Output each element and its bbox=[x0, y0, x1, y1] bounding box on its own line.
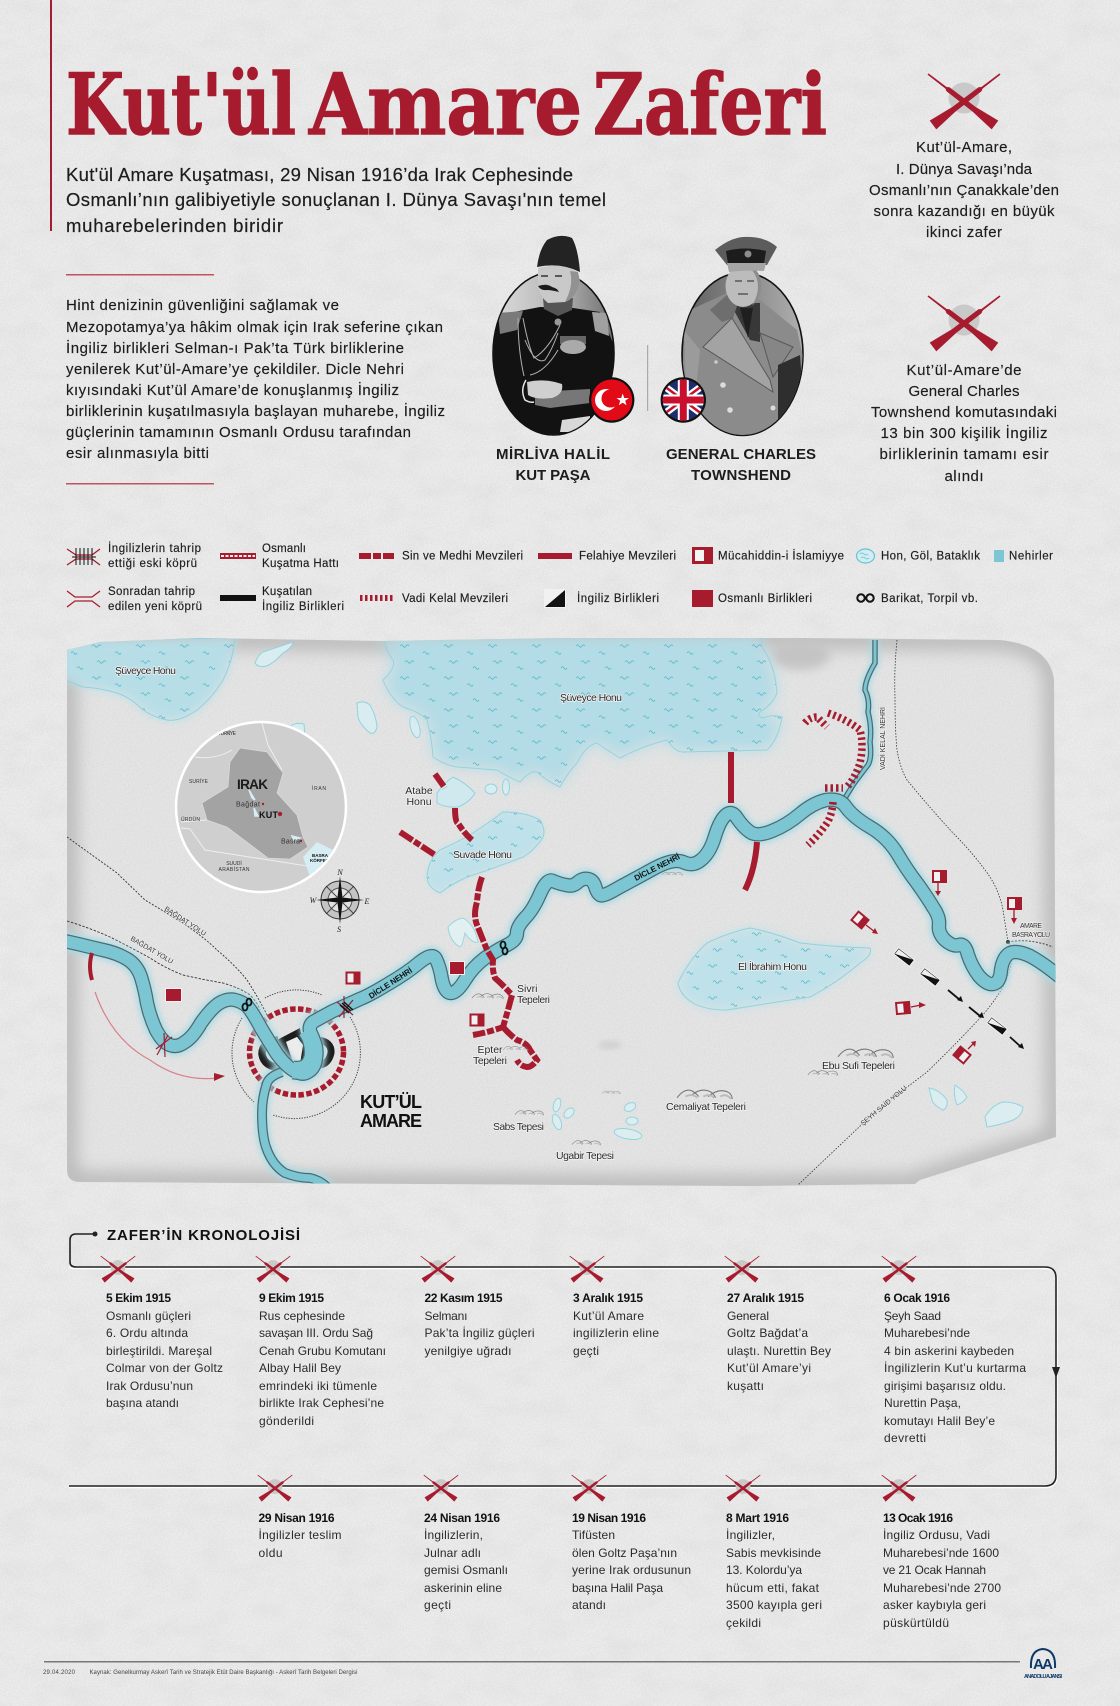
event: 9 Ekim 1915: Rus cephesinde bbox=[259, 1309, 345, 1323]
fact 2: birliklerinin tamamı esir bbox=[880, 446, 1048, 463]
map labels: Honu bbox=[406, 796, 432, 808]
event: 27 Aralık 1915: Kut’ül Amare’yi bbox=[727, 1361, 811, 1375]
legend: Ottoman units bbox=[692, 590, 812, 607]
map panel bbox=[60, 630, 1060, 1190]
event: 24 Nisan 1916: Julnar adlı bbox=[424, 1546, 481, 1560]
event: 6 Ocak 1916: İngilizlerin Kut’u kurtarma bbox=[884, 1361, 1026, 1375]
lake: southern ponds bbox=[551, 1085, 1023, 1141]
fact 2: Townshend komutasındaki bbox=[871, 404, 1057, 421]
event: 6 Ocak 1916: Nurettin Paşa, bbox=[884, 1396, 961, 1410]
event: 13 Ocak 1916 bbox=[881, 1475, 1001, 1630]
event: 19 Nisan 1916: 19 Nisan 1916 bbox=[572, 1511, 646, 1525]
icon: Turkish flag bbox=[589, 377, 634, 423]
intro paragraph: yenilerek Kut’ül-Amare’ye çekildiler. Dicle Nehri bbox=[66, 361, 404, 378]
event: 8 Mart 1916 bbox=[725, 1475, 822, 1630]
river: Dicle bbox=[60, 640, 1060, 1188]
lake: Şüveyce Honu west bbox=[60, 638, 235, 720]
inset map: Iraq: KUT bbox=[259, 810, 278, 820]
event: 5 Ekim 1915 bbox=[100, 1256, 223, 1410]
event: 19 Nisan 1916: yerine Irak ordusunun bbox=[572, 1563, 691, 1577]
compass rose: N bbox=[336, 868, 343, 877]
Kut encirclement dotted circle bbox=[232, 990, 360, 1119]
river and road labels: DİCLE NEHRİ bbox=[633, 852, 681, 883]
map labels: Epter bbox=[477, 1044, 503, 1056]
compass rose bbox=[310, 868, 370, 934]
road: Bağdat south bbox=[67, 921, 260, 1010]
legend: barricade: Barikat, Torpil vb. bbox=[881, 593, 978, 605]
legend: Mujahideen: Mücahiddin-i İslamiyye bbox=[718, 550, 844, 562]
chronology heading: ZAFER’İN KRONOLOJİSİ bbox=[107, 1227, 300, 1244]
intro paragraph: kıyısındaki Kut’ül Amare’de konuşlanmış İngiliz bbox=[66, 381, 399, 399]
event: 24 Nisan 1916: gemisi Osmanlı bbox=[424, 1563, 508, 1577]
Ottoman siege line bbox=[250, 1009, 344, 1095]
timeline line bbox=[69, 1232, 1060, 1488]
event: 6 Ocak 1916 bbox=[881, 1256, 1026, 1445]
hills bbox=[472, 872, 893, 1145]
logo: Anadolu Ajansı: AA bbox=[1033, 1656, 1053, 1673]
road junction dot bbox=[1006, 940, 1010, 944]
label: Kut'ül Amare bbox=[360, 1092, 422, 1131]
legend: destroyed old bridge: ettiği eski köprü bbox=[108, 558, 197, 570]
Sin and Medhi positions bbox=[400, 774, 537, 1067]
compass rose: S bbox=[337, 925, 341, 934]
map labels: Şüveyce Honu bbox=[115, 665, 176, 677]
timeline row 1 bbox=[100, 1256, 1026, 1445]
event: 22 Kasım 1915: Selmanı bbox=[424, 1309, 468, 1323]
event: 19 Nisan 1916: Tifüsten bbox=[572, 1528, 615, 1542]
icon: crossed rifles 2 bbox=[928, 295, 1000, 351]
legend: siege line bbox=[220, 543, 339, 570]
river and road labels: VADİ KELAL NEHRİ bbox=[878, 707, 887, 770]
bridge hatch bbox=[340, 1002, 353, 1013]
event: 24 Nisan 1916: İngilizlerin, bbox=[424, 1528, 483, 1542]
legend: British units bbox=[544, 590, 659, 608]
event: 22 Kasım 1915: Pak’ta İngiliz güçleri bbox=[424, 1326, 534, 1340]
legend: besieged British: Kuşatılan bbox=[262, 586, 312, 598]
map labels: Şüveyce Honu bbox=[560, 692, 622, 704]
legend: Vadi Kelal positions: Vadi Kelal Mevzileri bbox=[402, 593, 508, 605]
event: 19 Nisan 1916 bbox=[571, 1475, 691, 1612]
map labels: Sabs Tepesi bbox=[493, 1121, 544, 1133]
inset map: Iraq: SURİYE bbox=[189, 778, 209, 785]
event: 3 Aralık 1915: 3 Aralık 1915 bbox=[573, 1291, 643, 1305]
legend: lake: Hon, Göl, Bataklık bbox=[881, 550, 980, 562]
fact 2: alındı bbox=[944, 468, 984, 485]
Ottoman units bbox=[166, 962, 464, 1002]
event: 24 Nisan 1916: geçti bbox=[424, 1598, 451, 1612]
event: 8 Mart 1916: hücum etti, fakat bbox=[726, 1581, 820, 1595]
legend: rivers: Nehirler bbox=[1009, 550, 1053, 562]
header accent line bbox=[50, 0, 52, 231]
besieged British forces bbox=[262, 1028, 331, 1068]
event: 5 Ekim 1915: 5 Ekim 1915 bbox=[106, 1291, 171, 1305]
event: 27 Aralık 1915: 27 Aralık 1915 bbox=[727, 1291, 804, 1305]
legend: Felahiye positions: Felahiye Mevzileri bbox=[579, 550, 676, 562]
inset map: Iraq: İRAN bbox=[312, 785, 326, 792]
legend: siege line: Osmanlı bbox=[262, 543, 306, 555]
icon: UK flag bbox=[660, 377, 706, 423]
event: 9 Ekim 1915: 9 Ekim 1915 bbox=[259, 1291, 324, 1305]
river and road labels: DİCLE NEHRİ bbox=[367, 966, 414, 1001]
Ottoman advance arrow bbox=[95, 992, 225, 1081]
event: 13 Ocak 1916: Muharebesi’nde 1600 bbox=[883, 1546, 999, 1560]
event: 29 Nisan 1916: İngilizler teslim bbox=[258, 1528, 342, 1542]
event: 8 Mart 1916: Sabis mevkisinde bbox=[726, 1546, 821, 1560]
commander names: KUT PAŞA bbox=[516, 467, 591, 484]
title bbox=[66, 55, 827, 154]
event: 27 Aralık 1915: General bbox=[727, 1309, 769, 1323]
intro paragraph: İngiliz birlikleri Selman-ı Pak’ta Türk birliklerine bbox=[66, 339, 404, 357]
fact 2: Kut’ül-Amare’de bbox=[906, 362, 1022, 379]
fact 2: 13 bin 300 kişilik İngiliz bbox=[880, 424, 1048, 442]
portrait divider bbox=[647, 345, 648, 411]
event: 3 Aralık 1915: ingilizlerin eline bbox=[573, 1326, 659, 1340]
lake: Sivri pond bbox=[448, 918, 478, 947]
event: 9 Ekim 1915: Albay Halil Bey bbox=[259, 1361, 341, 1375]
inset map: Iraq: KÖRFEZİ bbox=[310, 857, 330, 863]
British units bbox=[894, 948, 1024, 1049]
fact 2: General Charles bbox=[908, 383, 1020, 400]
river and road labels: ŞEYH SAİD YOLU bbox=[859, 1083, 909, 1128]
event: 5 Ekim 1915: Irak Ordusu’nun bbox=[106, 1379, 193, 1393]
event: 6 Ocak 1916: girişimi başarısız oldu. bbox=[884, 1379, 1006, 1393]
event: 22 Kasım 1915 bbox=[420, 1256, 534, 1358]
commander names bbox=[496, 446, 816, 484]
portrait: General Charles Townshend bbox=[680, 237, 806, 440]
legend: later destroyed new bridge: edilen yeni köprü bbox=[108, 601, 202, 613]
event: 19 Nisan 1916: atandı bbox=[572, 1598, 606, 1612]
road: Vadi Kelal and Şeyh Said bbox=[798, 640, 1013, 1185]
legend: destroyed old bridge: İngilizlerin tahrip bbox=[108, 542, 201, 555]
compass rose: W bbox=[310, 896, 318, 905]
fact 1: Kut’ül-Amare, bbox=[916, 139, 1012, 156]
map labels: Ebu Sufi Tepeleri bbox=[822, 1060, 895, 1072]
compass rose: E bbox=[364, 897, 370, 906]
event: 8 Mart 1916: 8 Mart 1916 bbox=[726, 1511, 789, 1525]
fact 1: I. Dünya Savaşı’nda bbox=[896, 161, 1033, 178]
inset map: Iraq: ARABİSTAN bbox=[218, 866, 250, 873]
event: 24 Nisan 1916 bbox=[423, 1475, 508, 1612]
intro paragraph: Hint denizinin güvenliğini sağlamak ve bbox=[66, 297, 339, 314]
river and road labels bbox=[129, 707, 1050, 1128]
fact 1: ikinci zafer bbox=[926, 224, 1002, 241]
map labels: Suvade Honu bbox=[453, 849, 512, 861]
event: 24 Nisan 1916: askerinin eline bbox=[424, 1581, 502, 1595]
event: 13 Ocak 1916: 13 Ocak 1916 bbox=[883, 1511, 953, 1525]
event: 13 Ocak 1916: asker kaybıyla geri bbox=[883, 1598, 986, 1612]
legend: British units: İngiliz Birlikleri bbox=[577, 592, 659, 605]
logo: Anadolu Ajansı bbox=[1024, 1649, 1062, 1680]
portrait: Halil Kut Paşa bbox=[490, 236, 618, 440]
event: 22 Kasım 1915: 22 Kasım 1915 bbox=[424, 1291, 503, 1305]
map labels: Atabe bbox=[405, 785, 433, 797]
map labels: Ugabir Tepesi bbox=[556, 1150, 614, 1162]
event: 27 Aralık 1915: kuşattı bbox=[727, 1379, 764, 1393]
legend: Sin and Medhi positions: Sin ve Medhi Mevzileri bbox=[402, 550, 523, 562]
event: 9 Ekim 1915: savaşan III. Ordu Sağ bbox=[259, 1326, 373, 1340]
event: 6 Ocak 1916: devretti bbox=[884, 1431, 926, 1445]
river and road labels: BASRA YOLU bbox=[1012, 932, 1050, 939]
title: Amare bbox=[308, 55, 582, 154]
roads bbox=[67, 640, 1053, 1185]
river and road labels: AMARE bbox=[1020, 923, 1042, 930]
inset map: Iraq bbox=[176, 722, 346, 892]
intro paragraph bbox=[66, 297, 445, 462]
event: 6 Ocak 1916: 6 Ocak 1916 bbox=[884, 1291, 950, 1305]
river and road labels: BAĞDAT YOLU bbox=[129, 934, 175, 966]
title: Zaferi bbox=[593, 55, 827, 154]
event: 29 Nisan 1916: 29 Nisan 1916 bbox=[258, 1511, 335, 1525]
intro paragraph: güçlerinin tamamının Osmanlı Ordusu tarafından bbox=[66, 424, 411, 441]
river and road labels: BAĞDAT YOLU bbox=[163, 904, 208, 938]
event: 8 Mart 1916: 13. Kolordu’ya bbox=[726, 1563, 802, 1577]
event: 3 Aralık 1915: Kut’ül Amare bbox=[573, 1309, 644, 1323]
subtitle: Osmanlı’nın galibiyetiyle sonuçlanan I. Dünya Savaşı'nın temel bbox=[66, 189, 606, 210]
lake: Şüveyce Honu bbox=[383, 636, 782, 787]
map labels bbox=[115, 665, 895, 1162]
icon: crossed rifles 1 bbox=[928, 73, 1000, 129]
fact 2 bbox=[871, 362, 1057, 485]
footer rule bbox=[44, 1661, 1020, 1662]
intro paragraph: Mezopotamya’ya hâkim olmak için Irak seferine çıkan bbox=[66, 319, 443, 336]
Felahiye positions bbox=[90, 752, 757, 980]
event: 5 Ekim 1915: 6. Ordu altında bbox=[106, 1326, 188, 1340]
Mujahideen units bbox=[346, 870, 1022, 1064]
event: 9 Ekim 1915: emrindeki iki tümenle bbox=[259, 1379, 377, 1393]
footer source: 29.04.2020 bbox=[43, 1670, 76, 1676]
intro paragraph: esir alınmasıyla bitti bbox=[66, 445, 209, 462]
lake: Atabe Honu bbox=[437, 777, 475, 807]
event: 19 Nisan 1916: ölen Goltz Paşa’nın bbox=[572, 1546, 677, 1560]
legend: besieged British bbox=[220, 586, 344, 613]
event: 8 Mart 1916: çekildi bbox=[726, 1616, 761, 1630]
event: 27 Aralık 1915: ulaştı. Nurettin Bey bbox=[727, 1344, 831, 1358]
map labels: Sivri bbox=[517, 983, 537, 995]
event: 13 Ocak 1916: ve 21 Ocak Hannah bbox=[883, 1563, 986, 1577]
event: 13 Ocak 1916: Muharebesi’nde 2700 bbox=[883, 1581, 1001, 1595]
inset map: Iraq: IRAK bbox=[237, 777, 268, 792]
event: 29 Nisan 1916 bbox=[257, 1475, 342, 1560]
event: 13 Ocak 1916: püskürtüldü bbox=[883, 1616, 949, 1630]
label: Kut'ül Amare: KUT’ÜL bbox=[360, 1092, 422, 1112]
legend: later destroyed new bridge bbox=[67, 586, 202, 613]
inset map: Iraq: ÜRDÜN bbox=[181, 816, 200, 823]
map labels: Tepeleri bbox=[473, 1055, 507, 1067]
map labels: Tepeleri bbox=[517, 994, 550, 1006]
legend: Mujahideen bbox=[692, 547, 844, 564]
Vadi Kelal positions bbox=[805, 713, 862, 845]
event: 5 Ekim 1915: birleştirildi. Mareşal bbox=[106, 1344, 212, 1358]
commander names: MİRLİVA HALİL bbox=[496, 446, 610, 463]
subtitle: muharebelerinden biridir bbox=[66, 215, 283, 236]
map paper bbox=[60, 630, 1060, 1190]
barricades bbox=[242, 942, 508, 1010]
event: 9 Ekim 1915: Cenah Grubu Komutanı bbox=[259, 1344, 386, 1358]
inset map: Iraq: Bağdat bbox=[236, 802, 260, 808]
legend: Ottoman units: Osmanlı Birlikleri bbox=[718, 593, 812, 605]
bridges bbox=[156, 996, 353, 1057]
event: 9 Ekim 1915 bbox=[255, 1256, 386, 1428]
legend: siege line: Kuşatma Hattı bbox=[262, 558, 339, 570]
event: 9 Ekim 1915: birlikte Irak Cephesi’ne bbox=[259, 1396, 384, 1410]
footer source: Kaynak: Genelkurmay Askerî Tarih ve Stratejik Etüt Daire Başkanlığı - Askerî Tarih Belgeleri Dergisi bbox=[90, 1670, 358, 1676]
event: 22 Kasım 1915: yenilgiye uğradı bbox=[424, 1344, 512, 1358]
event: 3 Aralık 1915 bbox=[569, 1256, 659, 1358]
inset map: Iraq: TÜRKİYE bbox=[218, 730, 237, 737]
lake: El İbrahim Honu bbox=[678, 928, 871, 1010]
legend: destroyed old bridge bbox=[67, 542, 201, 570]
event: 8 Mart 1916: İngilizler, bbox=[726, 1528, 775, 1542]
inset map: Iraq: Basra bbox=[281, 838, 300, 846]
fact 1: sonra kazandığı en büyük bbox=[874, 203, 1055, 220]
logo: Anadolu Ajansı: ANADOLU AJANSI bbox=[1024, 1674, 1062, 1680]
legend: besieged British: İngiliz Birlikleri bbox=[262, 600, 344, 613]
commander names: TOWNSHEND bbox=[691, 467, 791, 484]
road: Bağdat north bbox=[67, 837, 267, 1015]
event: 5 Ekim 1915: Colmar von der Goltz bbox=[106, 1361, 223, 1375]
intro paragraph: birliklerinin kuşatılmasıyla başlayan muharebe, İngiliz bbox=[66, 402, 445, 420]
event: 5 Ekim 1915: başına atandı bbox=[106, 1396, 179, 1410]
timeline row 2 bbox=[257, 1475, 1001, 1630]
subtitle bbox=[66, 164, 606, 236]
title: Kut'ül bbox=[66, 55, 296, 154]
lake: small northern ponds bbox=[255, 642, 510, 795]
map labels: Cemaliyat Tepeleri bbox=[666, 1101, 746, 1113]
event: 27 Aralık 1915 bbox=[724, 1256, 831, 1393]
event: 9 Ekim 1915: gönderildi bbox=[259, 1414, 314, 1428]
label: Kut'ül Amare: AMARE bbox=[360, 1111, 422, 1131]
event: 13 Ocak 1916: İngiliz Ordusu, Vadi bbox=[883, 1528, 990, 1542]
event: 27 Aralık 1915: Goltz Bağdat’a bbox=[727, 1326, 808, 1340]
fact 1: Osmanlı’nın Çanakkale’den bbox=[869, 182, 1059, 199]
event: 5 Ekim 1915: Osmanlı güçleri bbox=[106, 1309, 191, 1323]
commander names: GENERAL CHARLES bbox=[666, 446, 816, 463]
fact 1 bbox=[869, 139, 1059, 241]
event: 6 Ocak 1916: komutayı Halil Bey’e bbox=[884, 1414, 995, 1428]
event: 19 Nisan 1916: başına Halil Paşa bbox=[572, 1581, 663, 1595]
event: 6 Ocak 1916: Şeyh Saad bbox=[884, 1309, 941, 1323]
event: 8 Mart 1916: 3500 kayıpla geri bbox=[726, 1598, 822, 1612]
lake: Suvade Honu bbox=[427, 812, 544, 893]
event: 29 Nisan 1916: oldu bbox=[258, 1546, 282, 1560]
event: 6 Ocak 1916: 4 bin askerini kaybeden bbox=[884, 1344, 1014, 1358]
road: Amare-Basra bbox=[1008, 941, 1053, 947]
legend bbox=[67, 542, 1053, 613]
event: 3 Aralık 1915: geçti bbox=[573, 1344, 599, 1358]
event: 24 Nisan 1916: 24 Nisan 1916 bbox=[424, 1511, 500, 1525]
map labels: El İbrahim Honu bbox=[738, 960, 807, 973]
inset map: Iraq: SUUDİ bbox=[226, 860, 242, 867]
legend: lake bbox=[856, 549, 980, 563]
subtitle: Kut'ül Amare Kuşatması, 29 Nisan 1916’da Irak Cephesinde bbox=[66, 164, 573, 185]
inset map: Iraq: BASRA bbox=[312, 853, 329, 858]
event: 6 Ocak 1916: Muharebesi’nde bbox=[884, 1326, 970, 1340]
legend: later destroyed new bridge: Sonradan tahrip bbox=[108, 586, 195, 598]
